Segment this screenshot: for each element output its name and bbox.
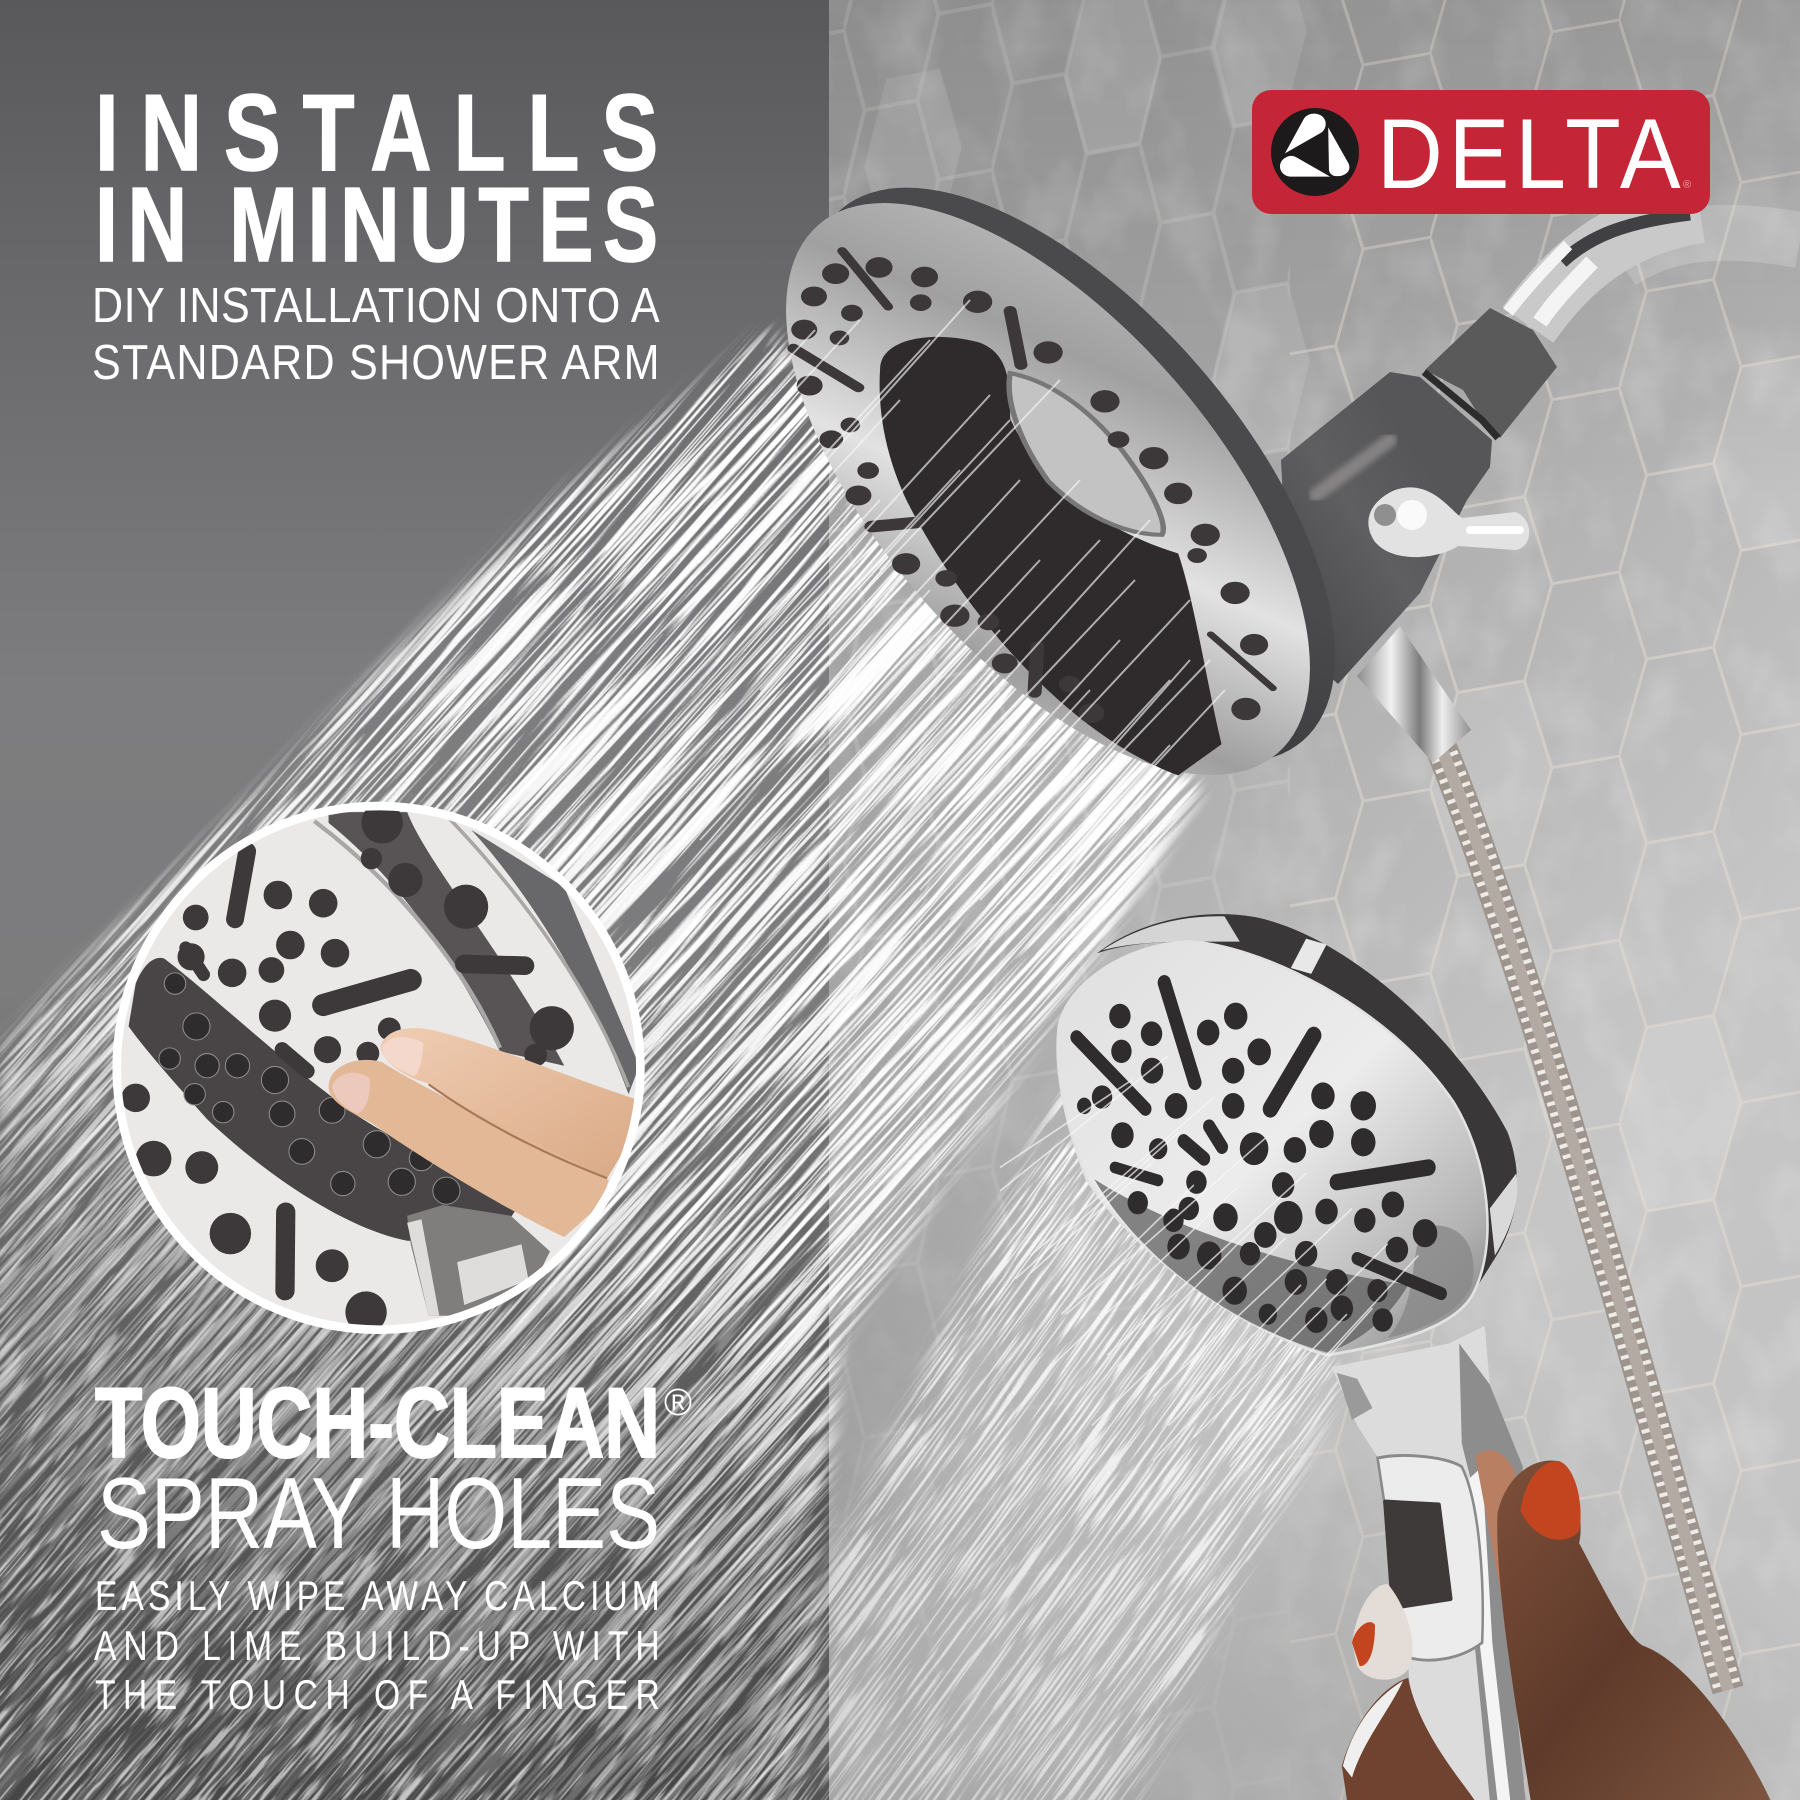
shower head: fixed rain head xyxy=(692,100,1557,863)
face plate xyxy=(1058,942,1488,1355)
heading: installs in minutes: IN MINUTES xyxy=(95,166,658,284)
index finger behind handle xyxy=(1476,1450,1541,1643)
logo red badge xyxy=(1252,90,1710,214)
spray nozzles xyxy=(791,257,1268,723)
logo wordmark: DELTA xyxy=(1377,100,1681,210)
heading: touch-clean spray holes: ® xyxy=(664,1382,692,1424)
text: touch-clean description: AND LIME BUILD-UP WITH xyxy=(94,1624,660,1670)
thumb nail polish xyxy=(1520,1461,1581,1540)
soft mist around hand shower spray xyxy=(760,1100,1340,1800)
dark inner band lower xyxy=(129,958,529,1244)
heading: installs in minutes xyxy=(95,72,658,284)
spray nozzles xyxy=(1077,1003,1437,1333)
white ring xyxy=(112,802,645,1334)
text: touch-clean description: EASILY WIPE AWAY CALCIUM xyxy=(95,1574,660,1620)
water spray from hand shower xyxy=(710,1092,1341,1800)
handle with chrome finish xyxy=(1332,1326,1526,1800)
chrome ellipse highlight xyxy=(407,1205,550,1316)
text: touch-clean description: THE TOUCH OF A FINGER xyxy=(95,1673,660,1719)
panel: translucent dark left column xyxy=(0,0,829,1800)
dark spray button xyxy=(1385,1502,1451,1608)
dark reflection low on the face xyxy=(1094,1179,1408,1352)
thumb and palm xyxy=(1497,1461,1770,1800)
text: DIY installation description: DIY INSTALLATION ONTO A xyxy=(92,277,660,333)
text: DIY installation description xyxy=(92,277,660,390)
fine water jets over hand shower face xyxy=(1000,1056,1418,1467)
heading: touch-clean spray holes: SPRAY HOLES xyxy=(97,1458,660,1570)
two fingers xyxy=(329,1028,643,1237)
metal shower hose xyxy=(1440,745,1728,1690)
dark outer rim xyxy=(715,100,1429,850)
soapy fingers at left xyxy=(1352,1584,1413,1680)
text: DIY installation description: STANDARD SHOWER ARM xyxy=(92,334,660,390)
logo: Delta xyxy=(1252,90,1710,214)
heading: touch-clean spray holes: TOUCH-CLEAN xyxy=(95,1367,660,1478)
nozzles on chrome and dark band xyxy=(121,802,574,1333)
dark inner band upper right xyxy=(329,812,564,1066)
inset circle: finger wiping the spray holes xyxy=(100,798,660,1334)
chrome hose connector xyxy=(1357,626,1471,763)
chrome diverter lever xyxy=(1368,487,1529,557)
small nozzles on dark band xyxy=(159,973,460,1204)
chrome face background xyxy=(121,810,636,1326)
chrome rim xyxy=(1097,914,1517,1291)
faceplate detail in local coordinates xyxy=(791,251,1273,775)
head body and collar xyxy=(1281,308,1557,684)
light window through opening xyxy=(1009,373,1163,535)
water spray from fixed head xyxy=(0,322,1208,1800)
heading: installs in minutes: INSTALLS xyxy=(95,72,658,193)
text: touch-clean description xyxy=(94,1574,660,1719)
fine water jets over faceplate xyxy=(600,300,1225,940)
logo: Delta: ® xyxy=(1683,179,1691,191)
dark outer head rim xyxy=(471,830,639,1094)
finger nails xyxy=(382,1037,423,1076)
hand holding the shower xyxy=(1342,1450,1770,1800)
central opening xyxy=(880,337,1222,775)
heading: touch-clean spray holes xyxy=(95,1367,692,1570)
logo emblem xyxy=(1271,108,1359,196)
shower head: hand shower xyxy=(1000,914,1526,1800)
shower arm and curved chrome pipe xyxy=(1508,212,1800,325)
chrome faceplate xyxy=(692,115,1404,863)
ring stroke on top xyxy=(117,806,640,1330)
